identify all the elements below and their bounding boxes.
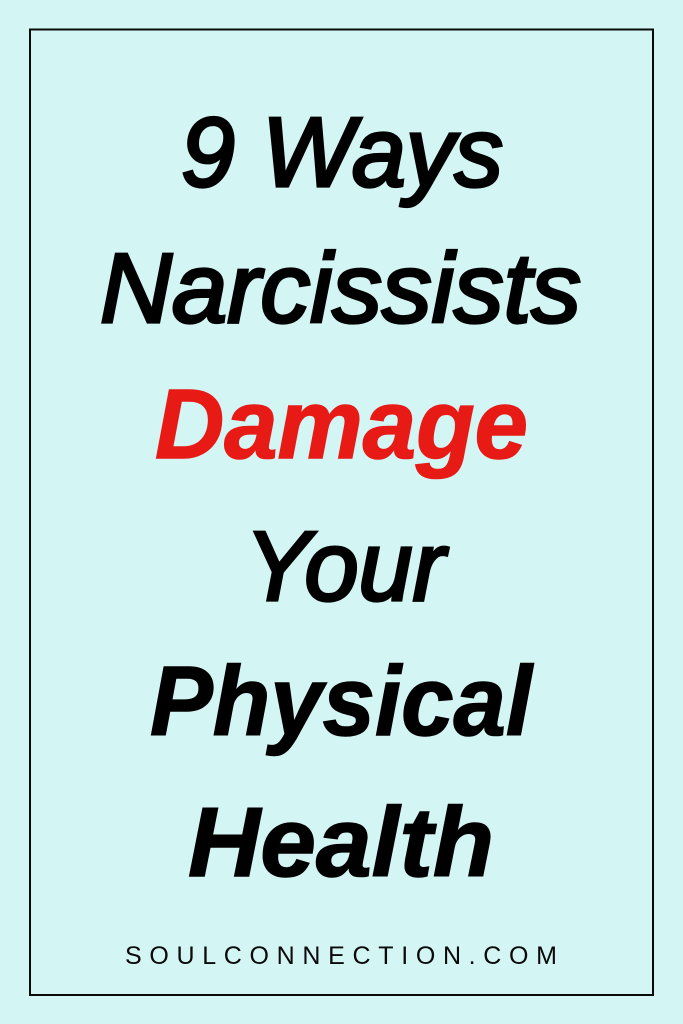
title line: Physical: Physical	[150, 646, 534, 756]
title line: Health: Health	[188, 787, 494, 897]
website footer: SOULCONNECTION.COM	[125, 942, 557, 970]
title line: 9 Ways: 9 Ways	[181, 97, 503, 207]
title line: Damage: Damage	[155, 369, 528, 479]
title line: Your: Your	[245, 511, 448, 621]
title	[100, 97, 581, 897]
title line: Narcissists: Narcissists	[100, 233, 581, 343]
